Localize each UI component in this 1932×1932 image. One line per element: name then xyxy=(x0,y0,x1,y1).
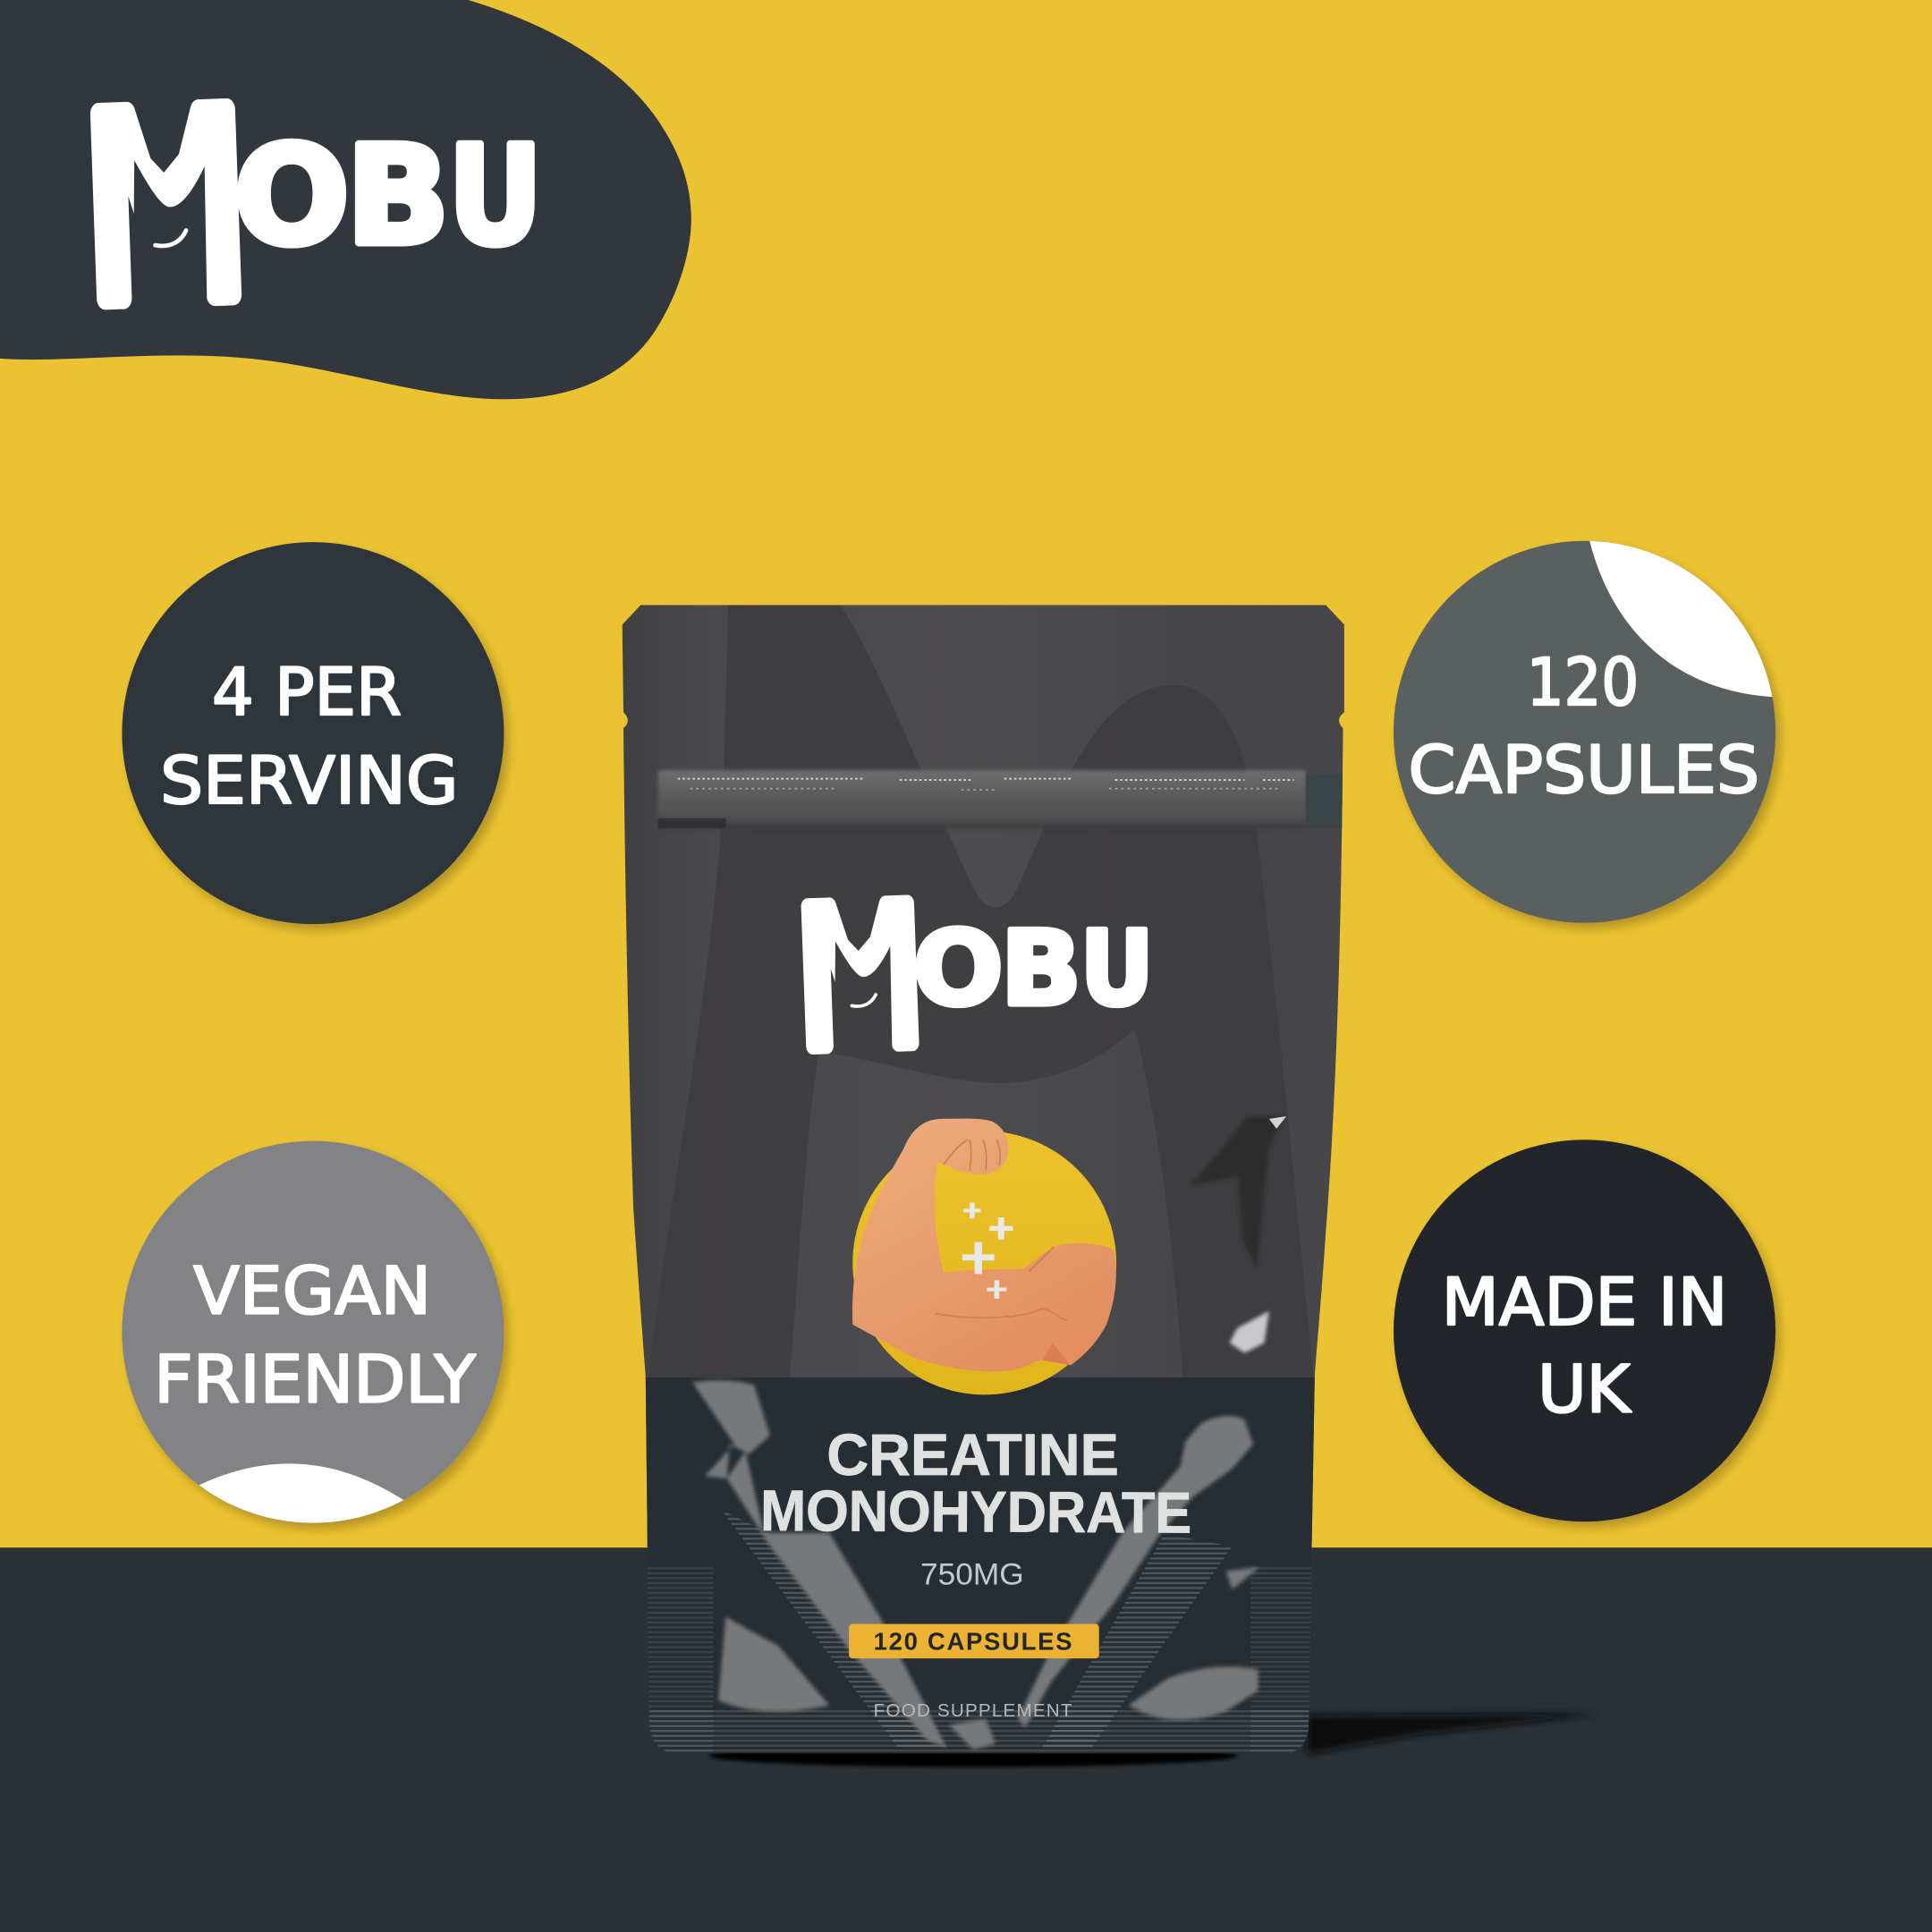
brand logo: U xyxy=(448,117,542,275)
capsule count label xyxy=(849,1624,1099,1658)
brand logo xyxy=(78,59,542,360)
dosage: 750MG xyxy=(920,1558,1024,1592)
dark lower band xyxy=(646,1377,1315,1753)
side gusset hatch xyxy=(646,1564,714,1756)
header blob xyxy=(0,0,691,399)
feature badge: made in UK: MADE IN xyxy=(1442,1265,1727,1341)
white corner accent xyxy=(1589,540,1778,708)
pouch logo xyxy=(792,866,1154,1092)
feature badge: 4 per serving: 4 PER xyxy=(212,655,402,731)
pouch logo: O xyxy=(913,910,1004,1029)
big M watermark on pouch xyxy=(648,605,1313,1377)
product name: MONOHYDRATE xyxy=(760,1478,1191,1546)
feature badge: vegan friendly: VEGAN xyxy=(193,1253,431,1329)
brand logo: M xyxy=(78,59,254,360)
glossy wrinkle right xyxy=(1189,1116,1286,1353)
feature badge: made in UK: UK xyxy=(1538,1352,1632,1428)
pouch logo: M xyxy=(792,866,928,1092)
feature badge: 120 capsules: CAPSULES xyxy=(1409,733,1759,809)
feature badge: 4 per serving: SERVING xyxy=(160,743,458,819)
food supplement note: FOOD SUPPLEMENT xyxy=(874,1700,1072,1721)
feature badge: 120 capsules xyxy=(1394,530,1824,923)
feature badge: vegan friendly: FRIENDLY xyxy=(154,1343,476,1419)
arm xyxy=(852,1119,1116,1371)
bag cast shadow xyxy=(708,1714,1602,1767)
capsule count label: 120 CAPSULES xyxy=(874,1628,1072,1656)
dark floor xyxy=(0,1547,1932,1932)
finger and muscle lines xyxy=(936,1140,1067,1321)
foil reflections xyxy=(692,1380,1259,1750)
white bottom accent xyxy=(197,1463,407,1534)
feature badge: 120 capsules: 120 xyxy=(1527,645,1639,721)
brand logo: B xyxy=(346,116,450,275)
feature badge: made in UK xyxy=(1394,1140,1775,1521)
product name xyxy=(760,1422,1191,1546)
feature badge: 4 per serving xyxy=(122,542,504,924)
pouch logo: B xyxy=(1001,910,1081,1029)
feature badge: vegan friendly xyxy=(122,1141,504,1534)
brand logo: O xyxy=(234,116,350,275)
product pouch xyxy=(616,597,1355,1762)
product name: CREATINE xyxy=(826,1422,1119,1488)
icon: flexed arm in yellow circle xyxy=(852,1119,1116,1394)
zip seal xyxy=(658,770,1344,828)
pouch logo: U xyxy=(1080,910,1154,1029)
logo smile xyxy=(156,231,186,246)
plus marks xyxy=(962,1202,1013,1299)
